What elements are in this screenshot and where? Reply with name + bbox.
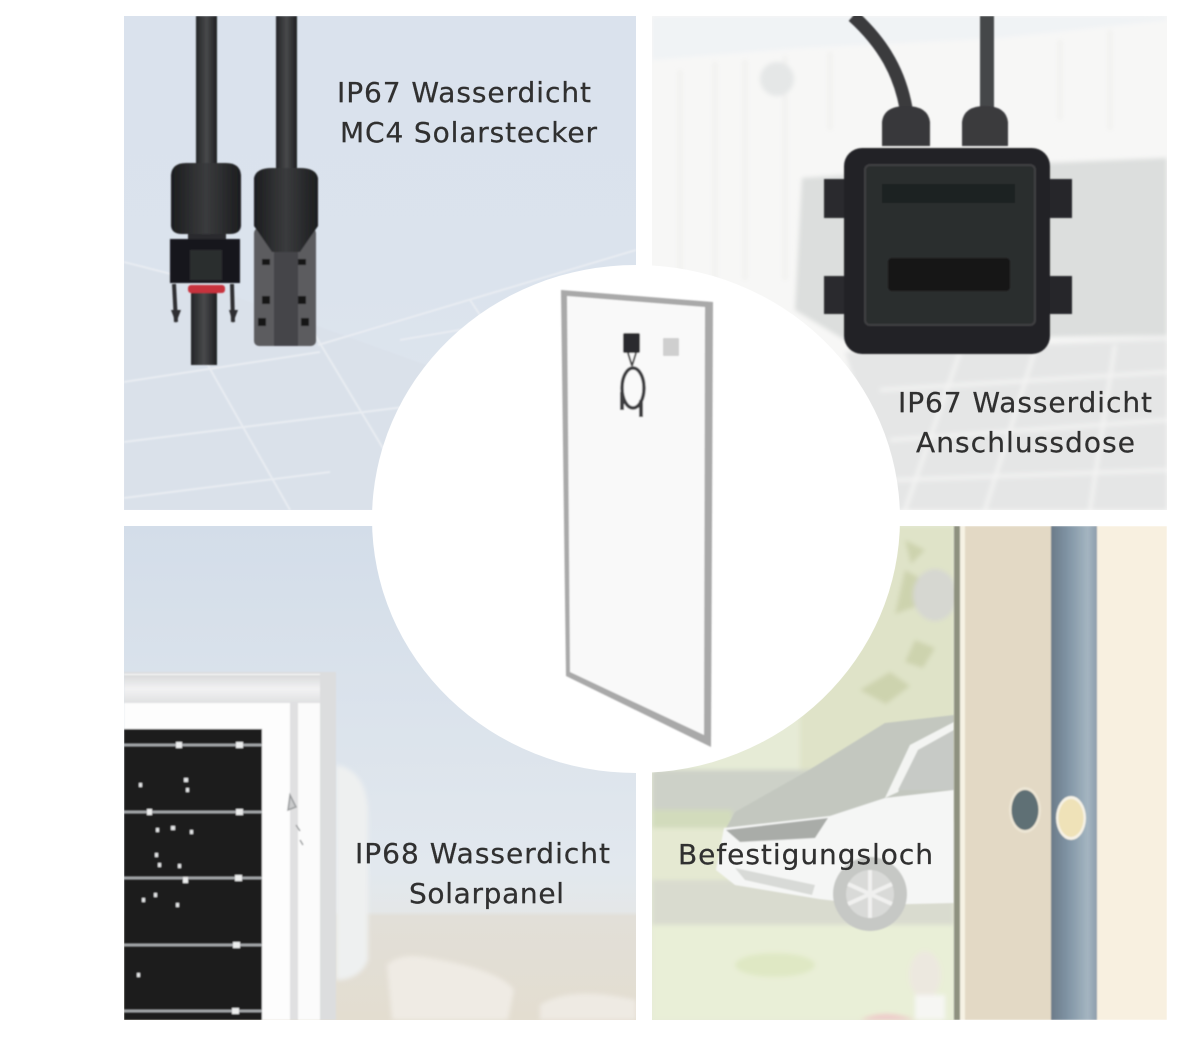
panel: mounting hole	[652, 526, 1167, 1020]
panel: solar panel	[124, 526, 636, 1020]
faded caravan background	[760, 62, 1167, 510]
car	[716, 715, 954, 931]
heading: junction box: IP67 Wasserdicht	[898, 386, 1152, 419]
icon: junction box	[824, 16, 1072, 354]
heading: junction box: Anschlussdose	[916, 426, 1135, 459]
faded solar field	[124, 250, 636, 480]
icon: solar panel rear view	[561, 290, 713, 747]
heading: solar panel: Solarpanel	[409, 877, 564, 910]
heading: solar panel	[355, 837, 610, 910]
panel: MC4 connector	[124, 16, 636, 510]
faded shoreline	[336, 765, 636, 1020]
icon: MC4 female connector	[254, 16, 318, 346]
heading: junction box	[900, 390, 1152, 453]
heading: MC4: IP67 Wasserdicht	[337, 76, 591, 109]
icon: mounting rail with holes	[954, 526, 1167, 1020]
panel: junction box	[652, 16, 1167, 510]
icon: MC4 male connector	[170, 16, 241, 365]
faded car scene	[652, 526, 957, 1020]
heading: MC4: MC4 Solarstecker	[340, 116, 597, 149]
center circle	[372, 265, 900, 773]
icon: panel frame	[124, 672, 336, 1020]
heading: solar panel: IP68 Wasserdicht	[355, 837, 610, 870]
heading: MC4	[340, 80, 598, 143]
heading: mounting hole: Befestigungsloch	[678, 838, 933, 871]
